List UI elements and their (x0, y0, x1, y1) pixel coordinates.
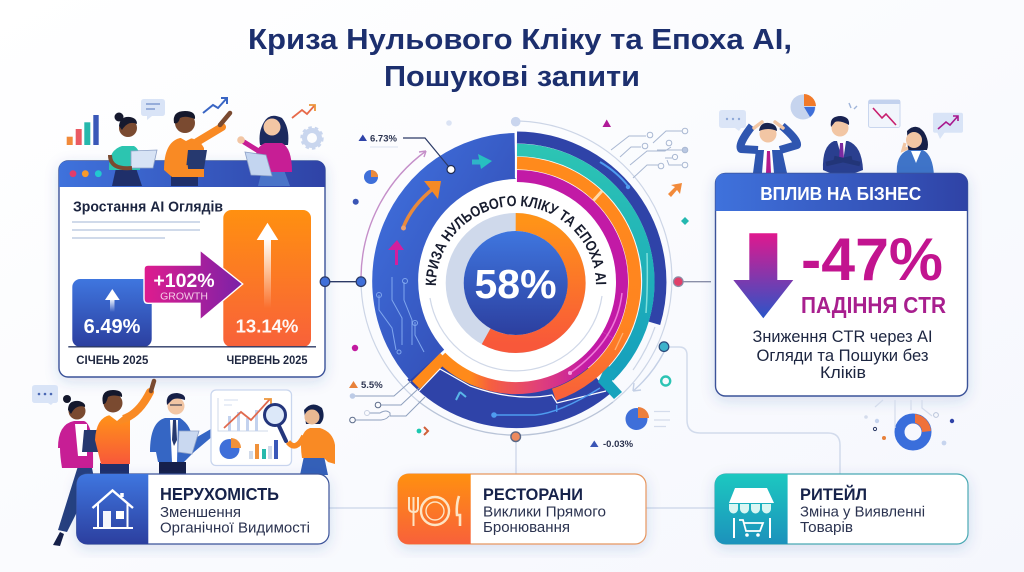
icon: chat (141, 99, 165, 120)
bar: June (223, 210, 311, 347)
outer thin ring (361, 121, 672, 435)
icon block (77, 474, 148, 544)
icon: pie (790, 94, 816, 120)
icon block (398, 474, 471, 544)
icon: zigzag arrow blue (203, 98, 227, 113)
icon: plate and cutlery (409, 496, 460, 526)
icon: zigzag arrow orange (292, 105, 315, 118)
icon: falling chart (868, 100, 900, 128)
person: man crossed arms (823, 116, 863, 173)
description: Зміна у Виявленні (800, 505, 925, 521)
card frame (77, 474, 329, 544)
magenta to orange band (441, 335, 608, 388)
orange radial divider (416, 357, 444, 385)
icon: dot (446, 120, 452, 126)
icon block (715, 474, 788, 544)
curved title: КРИЗА НУЛЬОВОГО КЛІКУ ТА ЕПОХА AI (426, 196, 606, 286)
decorative icons around donut (352, 120, 689, 435)
description: Кліків (820, 363, 866, 382)
card frame (59, 161, 325, 377)
person: teal woman (109, 112, 157, 186)
connector lines (329, 347, 840, 508)
icon: gear (302, 128, 322, 148)
bar: January: 6.49% (84, 316, 141, 338)
stat label: 5.5%: 5.5% (361, 380, 383, 391)
circuit lines bottom left (350, 381, 425, 423)
growth arrow: +102% (153, 270, 215, 292)
heading: Зростання AI Оглядів (73, 198, 223, 216)
stat label: -0.03%: -0.03% (603, 439, 634, 450)
card frame (715, 474, 968, 544)
person: woman on phone (897, 127, 934, 176)
person: orange woman (288, 404, 335, 475)
white inner disc (414, 179, 618, 383)
person: orange man (95, 381, 154, 474)
magenta arc (517, 176, 622, 335)
growth arrow (144, 250, 243, 320)
title (248, 24, 792, 93)
icon: down arrow (733, 233, 793, 318)
centre value: 58% (474, 261, 556, 307)
panel: retail (715, 474, 968, 544)
stat label: 6.73%: 6.73% (370, 134, 397, 144)
people: real estate team (32, 381, 335, 546)
icon: teal dot and chevron (417, 427, 428, 435)
axis labels: СІЧЕНЬ 2025 (76, 355, 149, 367)
card header (716, 174, 968, 211)
node: right (674, 277, 711, 287)
description: Зниження CTR через AI (752, 327, 932, 346)
placeholder lines (72, 222, 200, 238)
icon: pie with lines (626, 407, 670, 430)
node: left (330, 277, 366, 287)
card frame (716, 174, 968, 396)
icon: bars (67, 115, 99, 145)
stat label: -0.03% (590, 439, 634, 450)
circuit lines top right (611, 128, 688, 178)
axis labels: ЧЕРВЕНЬ 2025 (226, 355, 308, 367)
icon: donut with circuit dots (864, 400, 954, 446)
axis labels (76, 355, 308, 367)
icon: shop with cart (729, 488, 774, 538)
dark blue arc (517, 138, 660, 323)
window dots (70, 170, 102, 177)
bar: January (72, 279, 152, 347)
description (752, 327, 932, 382)
person: orange man (164, 111, 230, 186)
node: white on ring (403, 138, 455, 174)
description (483, 505, 606, 536)
title: Криза Нульового Кліку та Епоха AI, (248, 24, 792, 56)
icon: chat (32, 385, 58, 405)
panel: business impact (716, 174, 968, 396)
left blue segment (395, 156, 515, 365)
description: Товарів (800, 520, 853, 536)
heading: РИТЕЙЛ (800, 485, 867, 504)
orange arc (517, 163, 635, 395)
teal arc (517, 150, 648, 376)
small dots on rings (456, 185, 630, 418)
description: Огляди та Пошуки без (756, 346, 929, 365)
title: Пошукові запити (384, 61, 640, 93)
heading: НЕРУХОМІСТЬ (160, 484, 279, 504)
central donut chart (360, 120, 672, 436)
stat label: 5.5% (349, 380, 383, 391)
icon: teal ring (661, 376, 670, 386)
bar: June: 13.14% (236, 316, 298, 337)
description: Виклики Прямого (483, 505, 606, 521)
node: top (511, 117, 520, 126)
big number: -47% (801, 226, 943, 293)
growth arrows inside ring (388, 154, 492, 265)
icon: orange arrow (668, 183, 682, 197)
connector node (320, 277, 330, 287)
segment divider (515, 128, 517, 178)
panel: restaurants (398, 474, 646, 544)
icon: bubble with arrow (933, 113, 963, 139)
icon: sweat marks (849, 103, 857, 109)
icon: magnifier (264, 404, 286, 441)
people: growth team (109, 111, 292, 186)
icon: chat bubble (719, 110, 746, 131)
baseline (68, 346, 316, 348)
description (800, 505, 925, 536)
presentation board (211, 390, 292, 466)
node: bottom (511, 432, 520, 442)
panel: AI overviews growth (59, 161, 330, 377)
stat label: 6.73% (358, 134, 398, 147)
inner ring chart (430, 222, 602, 371)
panel: real estate (77, 474, 329, 544)
icon: house (92, 490, 133, 528)
person: magenta woman (237, 116, 292, 186)
growth arrow: GROWTH (160, 290, 208, 302)
node: teal (659, 342, 669, 352)
teal arc end (598, 365, 622, 399)
icon: small pie (364, 170, 378, 184)
icons above growth panel (67, 98, 322, 148)
icon: dot (353, 199, 359, 205)
description (160, 504, 310, 537)
icon: magenta triangle (602, 120, 611, 127)
card header (59, 161, 325, 187)
icon: teal diamond (681, 217, 689, 225)
description: Зменшення (160, 504, 241, 521)
heading: ВПЛИВ НА БІЗНЕС (760, 184, 921, 204)
person: blue suit man (150, 393, 221, 474)
icon: dot (352, 345, 358, 351)
heading: РЕСТОРАНИ (483, 486, 583, 504)
person: magenta woman (53, 395, 106, 546)
card frame (398, 474, 646, 544)
inner circuit lines (376, 162, 647, 415)
bottom dark blue segment (423, 366, 596, 407)
orange arc slash (593, 191, 602, 201)
people: worried business team (719, 94, 963, 176)
sub heading: ПАДІННЯ CTR (801, 292, 946, 318)
description: Органічної Видимості (160, 520, 310, 537)
person: man holding head (740, 122, 797, 173)
description: Бронювання (483, 520, 570, 536)
